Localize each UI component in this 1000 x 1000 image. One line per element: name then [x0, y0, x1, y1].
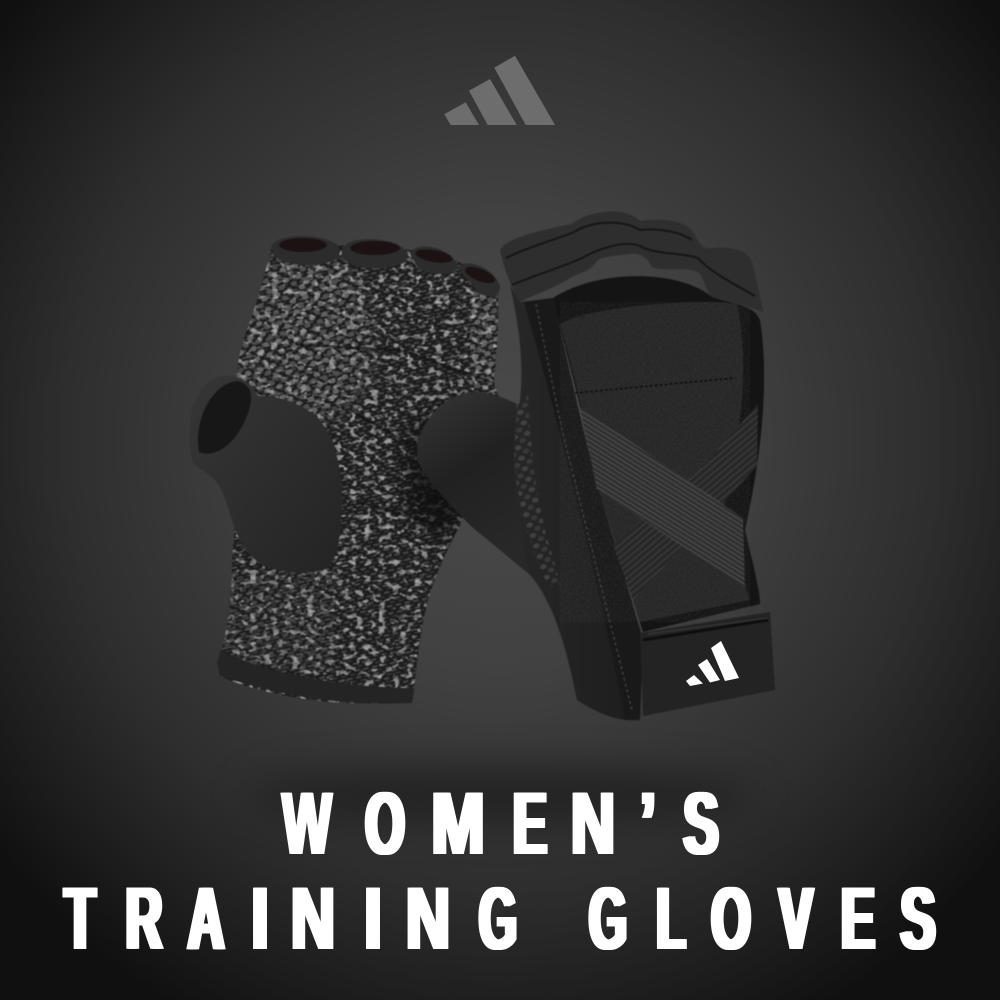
icon: adidas logo on strap	[686, 641, 739, 686]
title: WOMEN'S: ’	[641, 774, 655, 873]
title: WOMEN'S: M	[431, 774, 484, 873]
left glove	[190, 230, 510, 710]
title: TRAINING GLOVES	[62, 869, 936, 968]
finger openings	[272, 236, 500, 297]
felt padding	[560, 302, 750, 622]
title: TRAINING GLOVES: R	[126, 869, 162, 968]
icon: adidas logo top	[444, 56, 555, 125]
title: WOMEN'S: S	[684, 774, 718, 873]
side panel	[470, 285, 643, 720]
thumb	[417, 392, 530, 575]
title: TRAINING GLOVES: I	[365, 869, 381, 968]
finger band seams	[506, 223, 755, 296]
elastic strap back	[613, 404, 758, 600]
title: WOMEN'S	[280, 774, 720, 873]
elastic strap front	[580, 407, 745, 587]
side edge strip	[524, 298, 643, 720]
title: TRAINING GLOVES: O	[711, 869, 751, 968]
stitch line across palm	[575, 378, 735, 393]
floor shadow	[245, 767, 755, 823]
title: TRAINING GLOVES: V	[779, 869, 813, 968]
title: TRAINING GLOVES: N	[405, 869, 450, 968]
title: TRAINING GLOVES: N	[290, 869, 335, 968]
side snake strip	[514, 392, 562, 590]
title: TRAINING GLOVES: L	[656, 869, 686, 968]
thumb	[190, 376, 342, 573]
title: TRAINING GLOVES: A	[188, 869, 224, 968]
title: WOMEN'S: N	[570, 774, 615, 873]
glove body with snakeskin texture	[222, 244, 499, 704]
scene: logo, shadow and gloves	[195, 56, 775, 826]
title: TRAINING GLOVES: S	[900, 869, 935, 968]
cuff	[217, 650, 414, 704]
thumb opening	[198, 381, 251, 454]
title: WOMEN'S: O	[365, 774, 404, 873]
right glove	[417, 212, 775, 720]
title: TRAINING GLOVES: G	[589, 869, 627, 968]
stitching	[536, 304, 632, 710]
title: TRAINING GLOVES: E	[841, 869, 875, 968]
palm interior	[553, 276, 764, 632]
title: WOMEN'S: W	[282, 774, 332, 873]
title: TRAINING GLOVES: G	[479, 869, 517, 968]
title: TRAINING GLOVES: T	[65, 869, 95, 968]
wrist strap	[640, 612, 775, 716]
title: TRAINING GLOVES: I	[252, 869, 267, 968]
title: WOMEN'S: E	[513, 774, 547, 873]
finger band	[500, 212, 763, 312]
